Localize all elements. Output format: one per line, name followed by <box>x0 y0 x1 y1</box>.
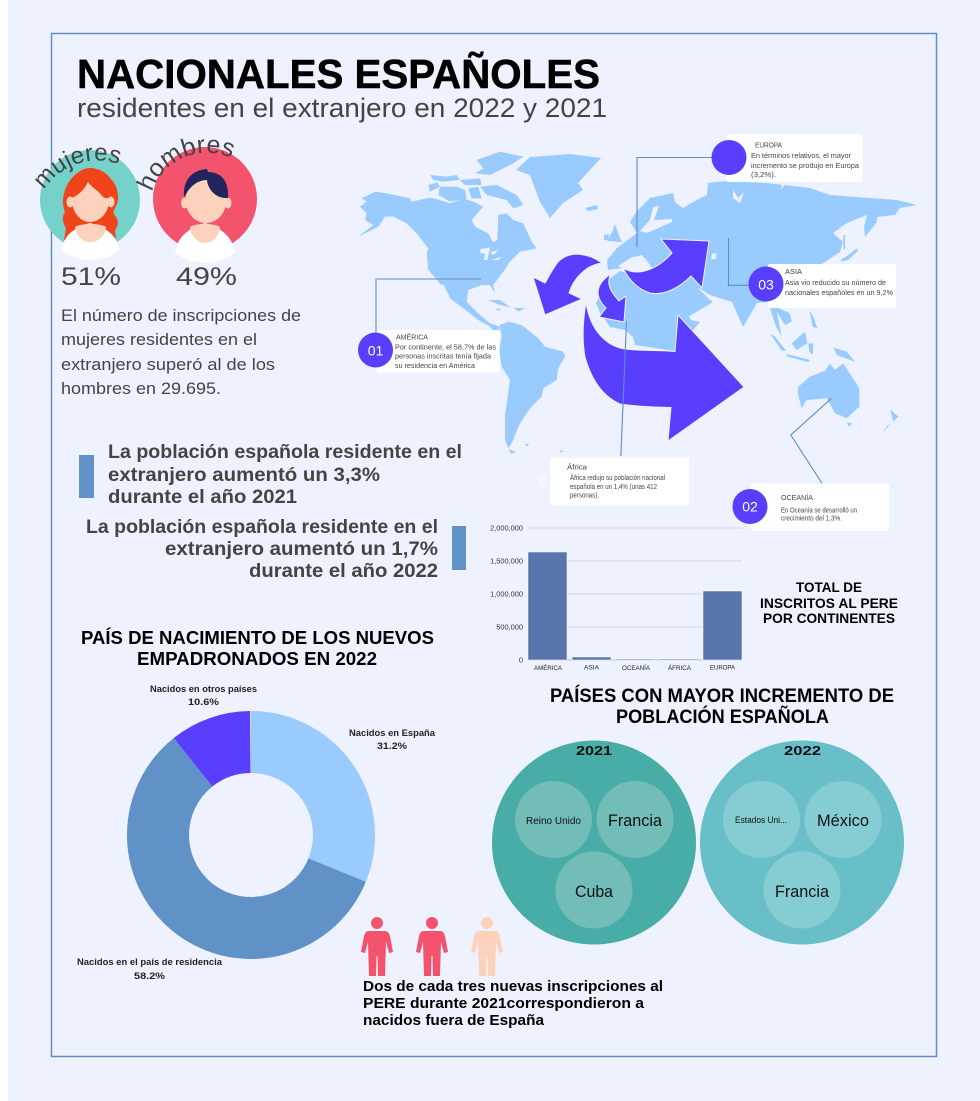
bubble chart: 2021: Reino Unido <box>526 816 581 827</box>
text block: 2022 growth: La población española residente en el <box>86 517 438 538</box>
callout: Oceanía: En Oceanía se desarrolló un <box>781 508 857 514</box>
text block: dos de cada tres: Dos de cada tres nuevas inscripciones al <box>363 978 663 995</box>
text block: 2022 growth <box>86 517 438 582</box>
bar chart: ÁFRICA <box>668 663 692 672</box>
donut labels: Nacidos en otros países <box>150 684 257 694</box>
callout: África: 0 <box>539 473 547 489</box>
callout: África: África <box>567 462 587 472</box>
icon: woman avatar <box>40 150 140 260</box>
text block: inscriptions <box>61 306 301 398</box>
marker: 2022 <box>452 526 466 570</box>
bubble chart: 2022: Estados Uni... <box>735 815 787 826</box>
bar chart: AMÉRICA <box>534 663 563 672</box>
stat: 51%: 51% <box>61 263 121 291</box>
bubble chart: 2022 <box>700 740 904 944</box>
bar chart: 2,000,000 <box>490 524 523 532</box>
heading: país de nacimiento: PAÍS DE NACIMIENTO DE LOS NUEVOS <box>81 627 434 648</box>
text block: 2022 growth: durante el año 2022 <box>249 561 438 582</box>
callout: Oceanía <box>732 484 889 531</box>
heading: total de inscritos: POR CONTINENTES <box>763 610 895 626</box>
text block: 2021 growth <box>108 442 462 508</box>
icon: person red 2 <box>416 917 448 976</box>
donut labels <box>77 684 436 981</box>
map: Greenland <box>516 154 601 218</box>
donut labels: Nacidos en España <box>349 728 436 738</box>
callout: América: 01 <box>368 342 383 358</box>
curved label: mujeres: mujeres <box>35 148 120 188</box>
map: Eurasia <box>607 181 917 327</box>
arrow: pointing up right <box>623 239 709 294</box>
callout: Europa: incremento se produjo en Europa <box>751 163 859 170</box>
bubble chart: 2021: Cuba <box>575 882 614 901</box>
donut labels: 10.6% <box>188 697 219 707</box>
arrow: pointing down left <box>533 254 602 315</box>
heading: total de inscritos: INSCRITOS AL PERE <box>760 595 898 611</box>
callout: Europa: (3,2%). <box>751 172 776 179</box>
donut chart <box>158 742 344 928</box>
callout: África: África redujo su población nacional <box>570 473 665 482</box>
donut labels: Nacidos en el país de residencia <box>77 957 223 967</box>
heading: total de inscritos: TOTAL DE <box>796 579 862 595</box>
text block: inscriptions: extranjero superó al de los <box>61 355 275 374</box>
heading: países con mayor incremento: POBLACIÓN ESPAÑOLA <box>616 706 829 728</box>
map: Africa <box>596 271 700 351</box>
callout: Oceanía: OCEANÍA <box>781 493 813 502</box>
map: South America <box>499 322 565 454</box>
marker: 2021 <box>79 455 94 498</box>
icon: person red 1 <box>361 917 393 976</box>
bar chart <box>490 524 742 672</box>
bar chart: 1,500,000 <box>490 556 523 566</box>
donut labels: 31.2% <box>377 741 407 751</box>
bar chart: 0 <box>519 656 523 664</box>
arrow: small over Africa <box>598 274 626 322</box>
bubble chart: 2022: 2022 <box>784 743 821 758</box>
text block: inscriptions: hombres en 29.695. <box>61 379 221 398</box>
callout: América: su residencia en América <box>395 363 475 370</box>
stat: 49%: 49% <box>176 263 237 291</box>
bar chart: EUROPA <box>710 664 736 672</box>
donut labels: 58.2% <box>134 971 165 981</box>
bar chart: OCEANÍA <box>622 663 651 672</box>
callout: Oceanía: crecimiento del 1,3%. <box>781 516 842 522</box>
callout: América: AMÉRICA <box>396 332 428 342</box>
callout: África <box>539 458 689 506</box>
bubble chart: 2021: Francia <box>608 811 663 830</box>
heading: total de inscritos <box>760 579 898 626</box>
bubble chart: 2022: México <box>817 811 869 830</box>
text block: 2021 growth: durante el año 2021 <box>108 487 297 508</box>
callout: África: personas). <box>570 492 599 500</box>
title: NACIONALES ESPAÑOLES <box>77 51 600 97</box>
heading: país de nacimiento <box>81 627 434 669</box>
callout: Asia: Asia vio reducido su número de <box>785 280 886 287</box>
text block: inscriptions: El número de inscripciones de <box>61 306 301 325</box>
bar chart: ASIA <box>584 664 600 672</box>
callout: Asia <box>748 264 896 308</box>
bar chart: 1,000,000 <box>490 590 523 598</box>
text block: 2021 growth: extranjero aumentó un 3,3% <box>108 465 380 486</box>
callout: Europa: EUROPA <box>755 142 782 150</box>
curved label: hombres: hombres <box>136 138 234 190</box>
icon: man avatar <box>153 147 257 262</box>
icon: person peach <box>471 917 503 976</box>
bubble chart: 2021 <box>492 740 696 944</box>
text block: dos de cada tres <box>363 978 663 1029</box>
heading: país de nacimiento: EMPADRONADOS EN 2022 <box>137 648 377 669</box>
callout: América: personas inscritas tenía fijada <box>395 354 491 360</box>
subtitle: residentes en el extranjero en 2022 y 2021 <box>77 93 607 123</box>
callout: Europa: En términos relativos, el mayor <box>751 153 852 160</box>
arrow: large pointing right <box>583 302 744 441</box>
heading: países con mayor incremento <box>550 685 894 728</box>
callout: Europa <box>712 134 862 182</box>
bubble chart: 2022: Francia <box>775 882 830 901</box>
callout: América <box>358 330 500 372</box>
map: North America and Arctic islands <box>358 152 537 337</box>
map: inland seas <box>618 182 788 280</box>
callout: América: Por continente, el 58,7% de las <box>395 344 497 352</box>
map: Asia Pacific and Oceania <box>768 235 898 434</box>
text block: dos de cada tres: PERE durante 2021correspondieron a <box>363 995 645 1012</box>
text block: inscriptions: mujeres residentes en el <box>61 330 257 349</box>
map: European islands <box>585 205 622 242</box>
world map <box>358 152 917 454</box>
callout: África: española en un 1,4% (unas 412 <box>570 484 657 491</box>
callout: Asia: nacionales españoles en un 9,2% <box>785 290 893 297</box>
callout: Asia: ASIA <box>785 269 802 276</box>
callout: Oceanía: 02 <box>742 498 758 514</box>
heading: países con mayor incremento: PAÍSES CON MAYOR INCREMENTO DE <box>550 685 894 707</box>
text block: 2022 growth: extranjero aumentó un 1,7% <box>165 539 438 560</box>
bubble chart: 2021: 2021 <box>576 743 612 758</box>
text block: 2021 growth: La población española residente en el <box>108 442 462 463</box>
text block: dos de cada tres: nacidos fuera de España <box>363 1012 545 1029</box>
bar chart: 500,000 <box>496 622 523 632</box>
leader lines <box>376 158 832 483</box>
callout: Asia: 03 <box>758 276 774 292</box>
